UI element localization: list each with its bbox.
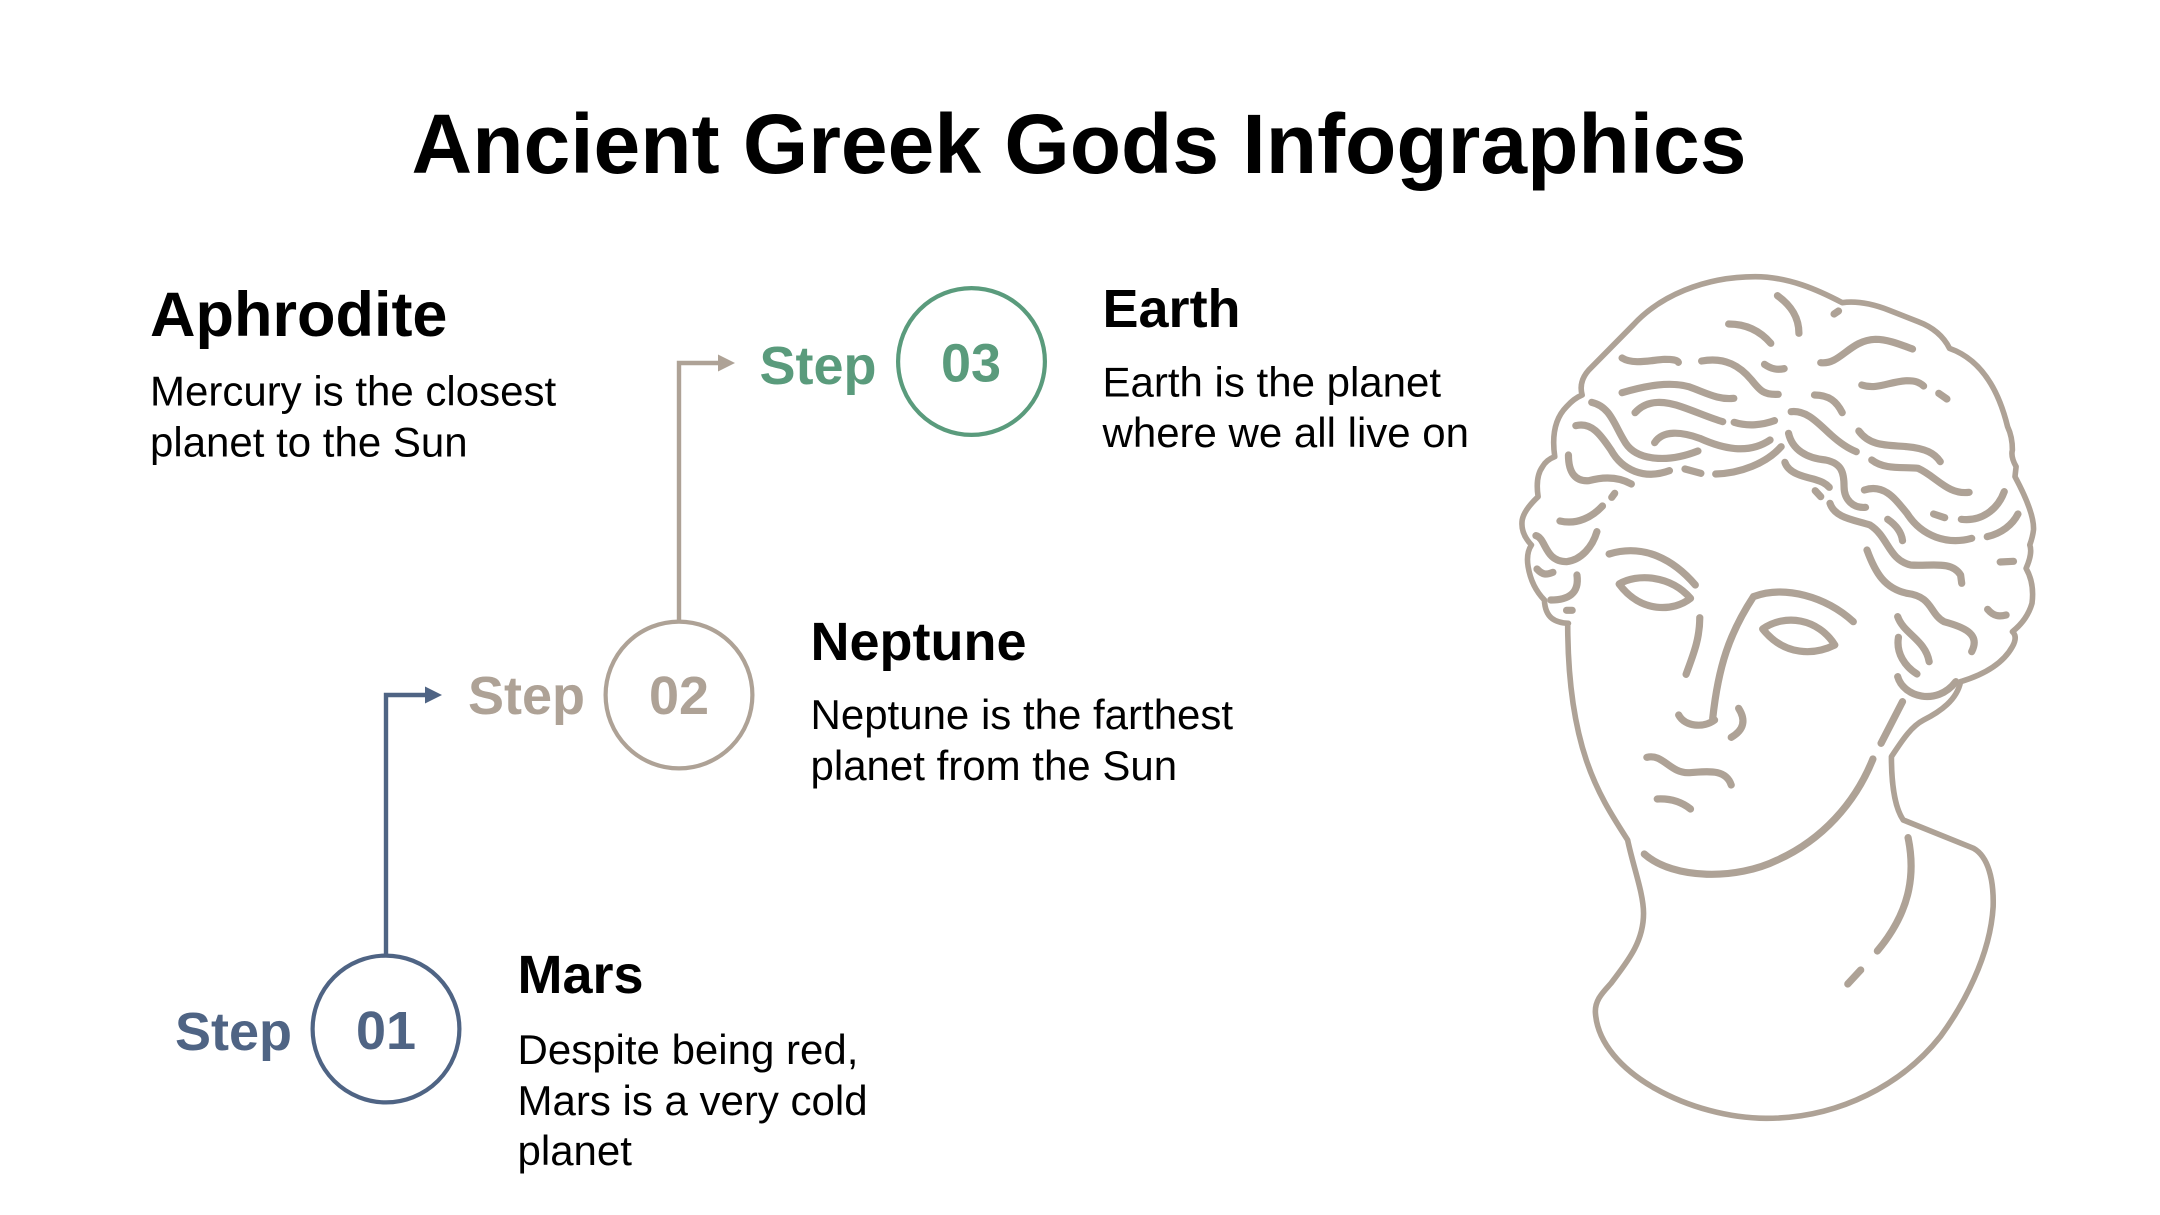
circle: step 01 xyxy=(313,956,459,1102)
description: Neptune: planet from the Sun xyxy=(810,742,1177,789)
heading: Aphrodite: Aphrodite xyxy=(150,280,447,350)
heading: Mars: Mars xyxy=(518,945,644,1005)
text block: Mars xyxy=(518,945,868,1174)
step 03 xyxy=(760,288,1045,435)
description: Neptune: Neptune is the farthest xyxy=(810,691,1233,738)
hair curls xyxy=(1536,296,2018,696)
description: Mars: Mars is a very cold xyxy=(518,1077,868,1124)
description: Earth: Earth is the planet xyxy=(1102,358,1441,406)
step 01 xyxy=(175,686,459,1102)
description: Mars: Despite being red, xyxy=(518,1026,858,1073)
title: Ancient Greek Gods Infographics xyxy=(412,97,1746,191)
face features xyxy=(1609,551,1911,984)
label: Step: Step xyxy=(468,666,585,726)
head outline xyxy=(1522,277,2034,1118)
description: Earth: where we all live on xyxy=(1102,409,1469,456)
text block: Earth xyxy=(1102,279,1469,456)
text block: Aphrodite xyxy=(150,280,556,466)
step 02 xyxy=(468,354,752,768)
description: Mars: planet xyxy=(518,1127,632,1174)
icon: Greek goddess head line drawing xyxy=(1522,277,2034,1118)
arrow: step 02 to step 03 xyxy=(679,354,735,621)
text block: Neptune xyxy=(810,612,1233,789)
arrow: step 01 to step 02 xyxy=(386,686,442,954)
circle: step 03 xyxy=(898,288,1045,435)
label: Step: Step xyxy=(175,1002,292,1062)
number: 03: 03 xyxy=(941,334,1001,394)
description: Aphrodite: planet to the Sun xyxy=(150,418,468,466)
number: 01: 01 xyxy=(356,1001,416,1061)
description: Aphrodite: Mercury is the closest xyxy=(150,368,556,414)
circle: step 02 xyxy=(606,622,752,768)
heading: Earth: Earth xyxy=(1102,279,1241,339)
number: 02: 02 xyxy=(649,666,709,726)
label: Step: Step xyxy=(760,336,877,396)
heading: Neptune: Neptune xyxy=(810,612,1026,672)
